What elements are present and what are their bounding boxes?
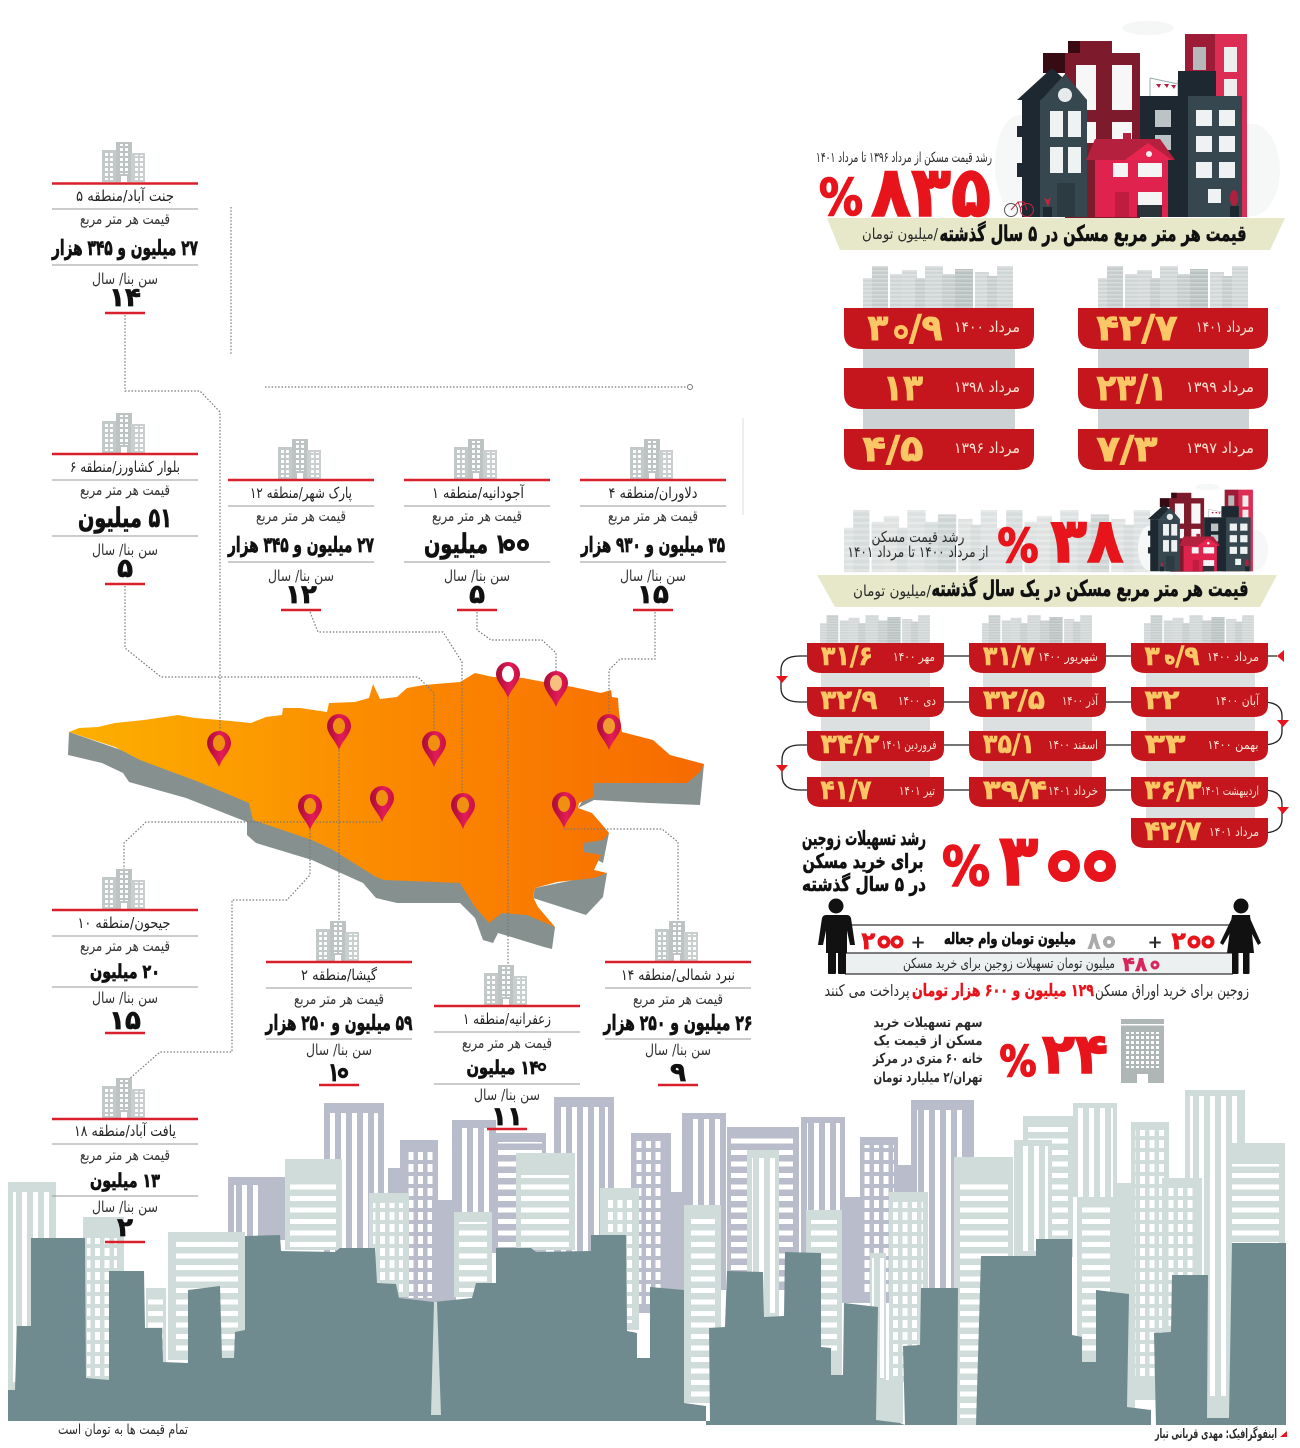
panel: district card Nabard Shomali: ۹	[670, 1058, 686, 1088]
text: couples loan growth: در ۵ سال گذشته	[802, 872, 926, 896]
panel: district card Jeyhun	[52, 869, 198, 1036]
icon: grey building	[1121, 1019, 1164, 1083]
panel: district card Delavaran: سن بنا/ سال	[620, 567, 686, 585]
panel: district card Jeyhun: ۲۰ میلیون	[90, 961, 160, 983]
panel: district card Keshavarz Boulevard: ۵۱ میلیون	[78, 503, 172, 534]
text: couples loan growth	[802, 826, 926, 896]
panel: couples loan breakdown: ۸۰	[1087, 927, 1115, 955]
subtitle: one year growth	[848, 528, 988, 561]
panel: five year prices: مرداد ۱۳۹۸	[954, 378, 1020, 396]
panel: district card Jeyhun: ۱۵	[109, 1006, 141, 1036]
panel: district card Zafaranieh: ۱۴۰ میلیون	[466, 1057, 548, 1079]
footnote: all prices in toman: تمام قیمت ها به تومان است	[58, 1422, 188, 1438]
illustration: small city houses	[1138, 484, 1268, 572]
panel: couples loan breakdown: میلیون تومان وام جعاله	[944, 929, 1076, 948]
panel: monthly price timeline: دی ۱۴۰۰	[898, 693, 936, 708]
text: bonds cost: پرداخت می کنند	[824, 981, 910, 1001]
panel: district card Delavaran: ۱۵	[637, 580, 669, 610]
panel: monthly price timeline	[776, 615, 1289, 848]
panel: district card Ajodanieh: قیمت هر متر مربع	[432, 507, 522, 525]
panel: monthly price timeline: ۳۲	[1144, 685, 1180, 716]
panel: district card Ajodanieh	[404, 439, 550, 610]
panel: district card Jeyhun: قیمت هر متر مربع	[80, 937, 170, 955]
big figure 24 percent: %	[1000, 1037, 1036, 1086]
panel: five year prices: مرداد ۱۴۰۰	[954, 318, 1020, 336]
panel: district card Zafaranieh: زعفرانیه/منطقه ۱	[463, 1010, 551, 1028]
panel: district card Keshavarz Boulevard: قیمت هر متر مربع	[80, 481, 170, 499]
panel: district card Park Shahr: ۲۷ میلیون و ۳۴۵ هزار	[227, 533, 374, 557]
panel: monthly price timeline: ۴۱/۷	[820, 775, 872, 806]
panel: district card Yaftabad: یافت آباد/منطقه ۱۸	[74, 1122, 176, 1140]
panel: five year prices: ۲۳/۱	[1096, 368, 1168, 409]
panel: couples loan breakdown: میلیون تومان تسهیلات زوجین برای خرید مسکن	[903, 956, 1115, 972]
panel: monthly price timeline: اردیبهشت ۱۴۰۱	[1201, 783, 1259, 799]
panel: district card Zafaranieh: قیمت هر متر مربع	[462, 1034, 552, 1052]
big figure 835 percent: ۸۳۵	[871, 151, 991, 233]
text: share of loan	[872, 1015, 983, 1086]
panel: couples loan breakdown: ۴۸۰	[1122, 952, 1160, 976]
panel: district card Park Shahr: سن بنا/ سال	[268, 567, 334, 585]
heading band: five years	[827, 218, 1285, 250]
big figure 24 percent: ۲۴	[1042, 1022, 1108, 1087]
text: share of loan: سهم تسهیلات خرید	[874, 1015, 982, 1031]
panel: five year prices: ۴۲/۷	[1096, 308, 1178, 349]
panel: monthly price timeline: ۳۰/۹	[1144, 641, 1200, 672]
connector lines from districts to map pins	[124, 315, 678, 1080]
big figure 38 percent: %	[998, 519, 1038, 573]
panel: five year prices: مرداد ۱۳۹۹	[1186, 378, 1254, 396]
panel: monthly price timeline: اسفند ۱۴۰۰	[1048, 737, 1098, 752]
panel: monthly price timeline: ۳۲/۵	[983, 685, 1045, 716]
text: share of loan: خانه ۶۰ متری در مرکز	[872, 1051, 983, 1067]
heading band: five years: /میلیون تومان	[862, 225, 939, 243]
panel: monthly price timeline: ۳۲/۹	[820, 685, 878, 716]
panel: district card Yaftabad: ۱۳ میلیون	[90, 1170, 160, 1192]
panel: district card Gisha: گیشا/منطقه ۲	[301, 966, 378, 984]
panel: five year prices: ۳۰/۹	[868, 308, 943, 349]
panel: district card Nabard Shomali	[603, 921, 752, 1088]
panel: district card Jannatabad: ۱۴	[109, 283, 141, 313]
icon: woman	[1220, 898, 1261, 974]
panel: district card Gisha: سن بنا/ سال	[306, 1041, 372, 1059]
panel: district card Yaftabad: ۲	[117, 1213, 133, 1243]
subtitle: one year growth: از مرداد ۱۴۰۰ تا مرداد ۱۴۰۱	[848, 543, 988, 561]
text: share of loan: مسکن از قیمت یک	[874, 1033, 982, 1049]
big figure 300 percent: %	[942, 835, 990, 898]
panel: district card Keshavarz Boulevard: سن بنا/ سال	[92, 541, 158, 559]
panel: district card Keshavarz Boulevard	[52, 413, 198, 584]
panel: district card Nabard Shomali: قیمت هر متر مربع	[633, 990, 723, 1008]
text: bonds cost	[824, 981, 1249, 1001]
panel: monthly price timeline: بهمن ۱۴۰۰	[1208, 737, 1258, 753]
big figure 24 percent	[1000, 1022, 1108, 1087]
panel: district card Zafaranieh: ۱۱	[491, 1102, 523, 1132]
panel: district card Delavaran	[580, 439, 726, 610]
panel: monthly price timeline: مرداد ۱۴۰۱	[1209, 824, 1259, 840]
panel: five year prices: ۱۳	[883, 368, 923, 409]
panel: monthly price timeline: ۳۳	[1144, 729, 1186, 760]
panel: five year prices: مرداد ۱۳۹۶	[954, 439, 1020, 457]
panel: monthly price timeline: مهر ۱۴۰۰	[893, 649, 935, 665]
panel: district card Ajodanieh: سن بنا/ سال	[444, 567, 510, 585]
icon: man	[818, 898, 855, 974]
panel: monthly price timeline: ۳۵/۱	[983, 729, 1035, 760]
panel: five year prices: ۷/۳	[1096, 429, 1158, 470]
panel: district card Jeyhun: سن بنا/ سال	[92, 989, 158, 1007]
panel: district card Jannatabad: ۲۷ میلیون و ۳۴۵ هزار	[51, 236, 198, 260]
text: couples loan growth: برای خرید مسکن	[802, 849, 924, 873]
panel: district card Gisha: ۱۰	[328, 1058, 350, 1088]
panel: monthly price timeline: آذر ۱۴۰۰	[1062, 693, 1098, 709]
big figure 835 percent	[819, 151, 991, 233]
panel: district card Park Shahr: قیمت هر متر مربع	[256, 507, 346, 525]
panel: district card Ajodanieh: ۵	[469, 580, 485, 610]
panel: district card Delavaran: قیمت هر متر مربع	[608, 507, 698, 525]
panel: district card Nabard Shomali: سن بنا/ سال	[645, 1041, 711, 1059]
panel: monthly price timeline: فروردین ۱۴۰۱	[882, 737, 937, 753]
panel: district card Park Shahr: پارک شهر/منطقه ۱۲	[250, 484, 352, 503]
decorative city skyline	[8, 1090, 1286, 1425]
text: couples loan growth: رشد تسهیلات زوجین	[802, 826, 926, 850]
text: bonds cost: ۱۲۹ میلیون و ۶۰۰ هزار تومان	[912, 981, 1094, 1001]
map of Tehran	[68, 673, 704, 949]
subtitle: one year growth: رشد قیمت مسکن	[872, 528, 964, 546]
panel: monthly price timeline: ۳۶/۳	[1144, 775, 1202, 806]
panel: district card Keshavarz Boulevard: ۵	[117, 554, 133, 584]
panel: monthly price timeline: ۳۱/۶	[821, 641, 873, 672]
panel: couples loan breakdown: ۲۰۰	[862, 927, 902, 955]
panel: couples loan breakdown: ۲۰۰	[1172, 927, 1214, 955]
panel: couples loan breakdown: +	[1147, 932, 1163, 953]
panel: district card Zafaranieh	[434, 965, 580, 1132]
panel: monthly price timeline: ۳۹/۴	[983, 775, 1047, 806]
panel: district card Yaftabad: قیمت هر متر مربع	[80, 1146, 170, 1164]
text: share of loan: تهران/۲ میلیارد تومان	[874, 1070, 982, 1086]
panel: monthly price timeline: مرداد ۱۴۰۰	[1207, 649, 1259, 665]
big figure 38 percent: ۳۸	[1050, 504, 1124, 577]
panel: district card Keshavarz Boulevard: بلوار کشاورز/منطقه ۶	[70, 458, 180, 476]
panel: district card Jannatabad	[51, 142, 198, 313]
decorative skyline strip	[844, 510, 1150, 572]
panel: district card Nabard Shomali: نبرد شمالی/منطقه ۱۴	[621, 966, 735, 984]
big figure 38 percent	[998, 504, 1124, 577]
text: bonds cost: زوجین برای خرید اوراق مسکن	[1095, 981, 1249, 1001]
panel: monthly price timeline: ۴۲/۷	[1144, 816, 1202, 847]
big figure 300 percent	[942, 818, 1117, 902]
panel: monthly price timeline: ۳۱/۷	[983, 641, 1035, 672]
panel: district card Delavaran: ۳۵ میلیون و ۹۳۰ هزار	[580, 533, 725, 557]
panel: district card Jannatabad: قیمت هر متر مربع	[80, 210, 170, 228]
big figure 835 percent: %	[819, 169, 863, 227]
panel: district card Jannatabad: جنت آباد/منطقه ۵	[76, 187, 174, 205]
panel: monthly price timeline: ۳۴/۲	[820, 729, 880, 760]
panel: couples loan breakdown	[818, 898, 1261, 976]
heading band: one year: /میلیون تومان	[853, 582, 932, 600]
illustration: city houses	[995, 21, 1280, 218]
decorative dotted guide lines	[231, 207, 743, 515]
panel: five year prices: مرداد ۱۳۹۷	[1186, 439, 1254, 457]
panel: district card Gisha: قیمت هر متر مربع	[294, 990, 384, 1008]
map pins	[207, 662, 621, 830]
panel: five year prices: ۴/۵	[862, 429, 924, 470]
panel: monthly price timeline: خرداد ۱۴۰۱	[1048, 783, 1098, 799]
panel: couples loan breakdown: +	[910, 932, 926, 953]
panel: district card Ajodanieh: آجودانیه/منطقه ۱	[432, 484, 525, 502]
panel: five year prices: مرداد ۱۴۰۱	[1196, 318, 1254, 336]
panel: five year prices	[844, 266, 1268, 470]
panel: district card Zafaranieh: سن بنا/ سال	[474, 1086, 540, 1104]
subtitle: price growth 1396 to 1401: رشد قیمت مسکن از مرداد ۱۳۹۶ تا مرداد ۱۴۰۱	[816, 150, 992, 166]
panel: district card Yaftabad	[52, 1078, 198, 1243]
panel: monthly price timeline: آبان ۱۴۰۰	[1215, 693, 1259, 708]
panel: district card Jeyhun: جیحون/منطقه ۱۰	[77, 914, 170, 932]
panel: district card Yaftabad: سن بنا/ سال	[92, 1198, 158, 1216]
heading band: one year	[817, 575, 1277, 607]
panel: district card Park Shahr: ۱۲	[285, 580, 317, 610]
panel: district card Gisha: ۵۹ میلیون و ۲۵۰ هزار	[265, 1011, 413, 1035]
panel: district card Ajodanieh: ۱۰۰ میلیون	[424, 529, 530, 560]
panel: monthly price timeline: شهریور ۱۴۰۰	[1038, 649, 1098, 665]
panel: district card Park Shahr	[227, 439, 374, 610]
panel: district card Jannatabad: سن بنا/ سال	[92, 270, 158, 288]
panel: district card Gisha	[265, 921, 413, 1088]
panel: district card Nabard Shomali: ۲۶ میلیون و ۲۵۰ هزار	[603, 1011, 752, 1035]
panel: district card Delavaran: دلاوران/منطقه ۴	[608, 484, 698, 502]
panel: monthly price timeline: تیر ۱۴۰۱	[899, 783, 935, 799]
big figure 300 percent: ۳۰۰	[999, 818, 1117, 902]
